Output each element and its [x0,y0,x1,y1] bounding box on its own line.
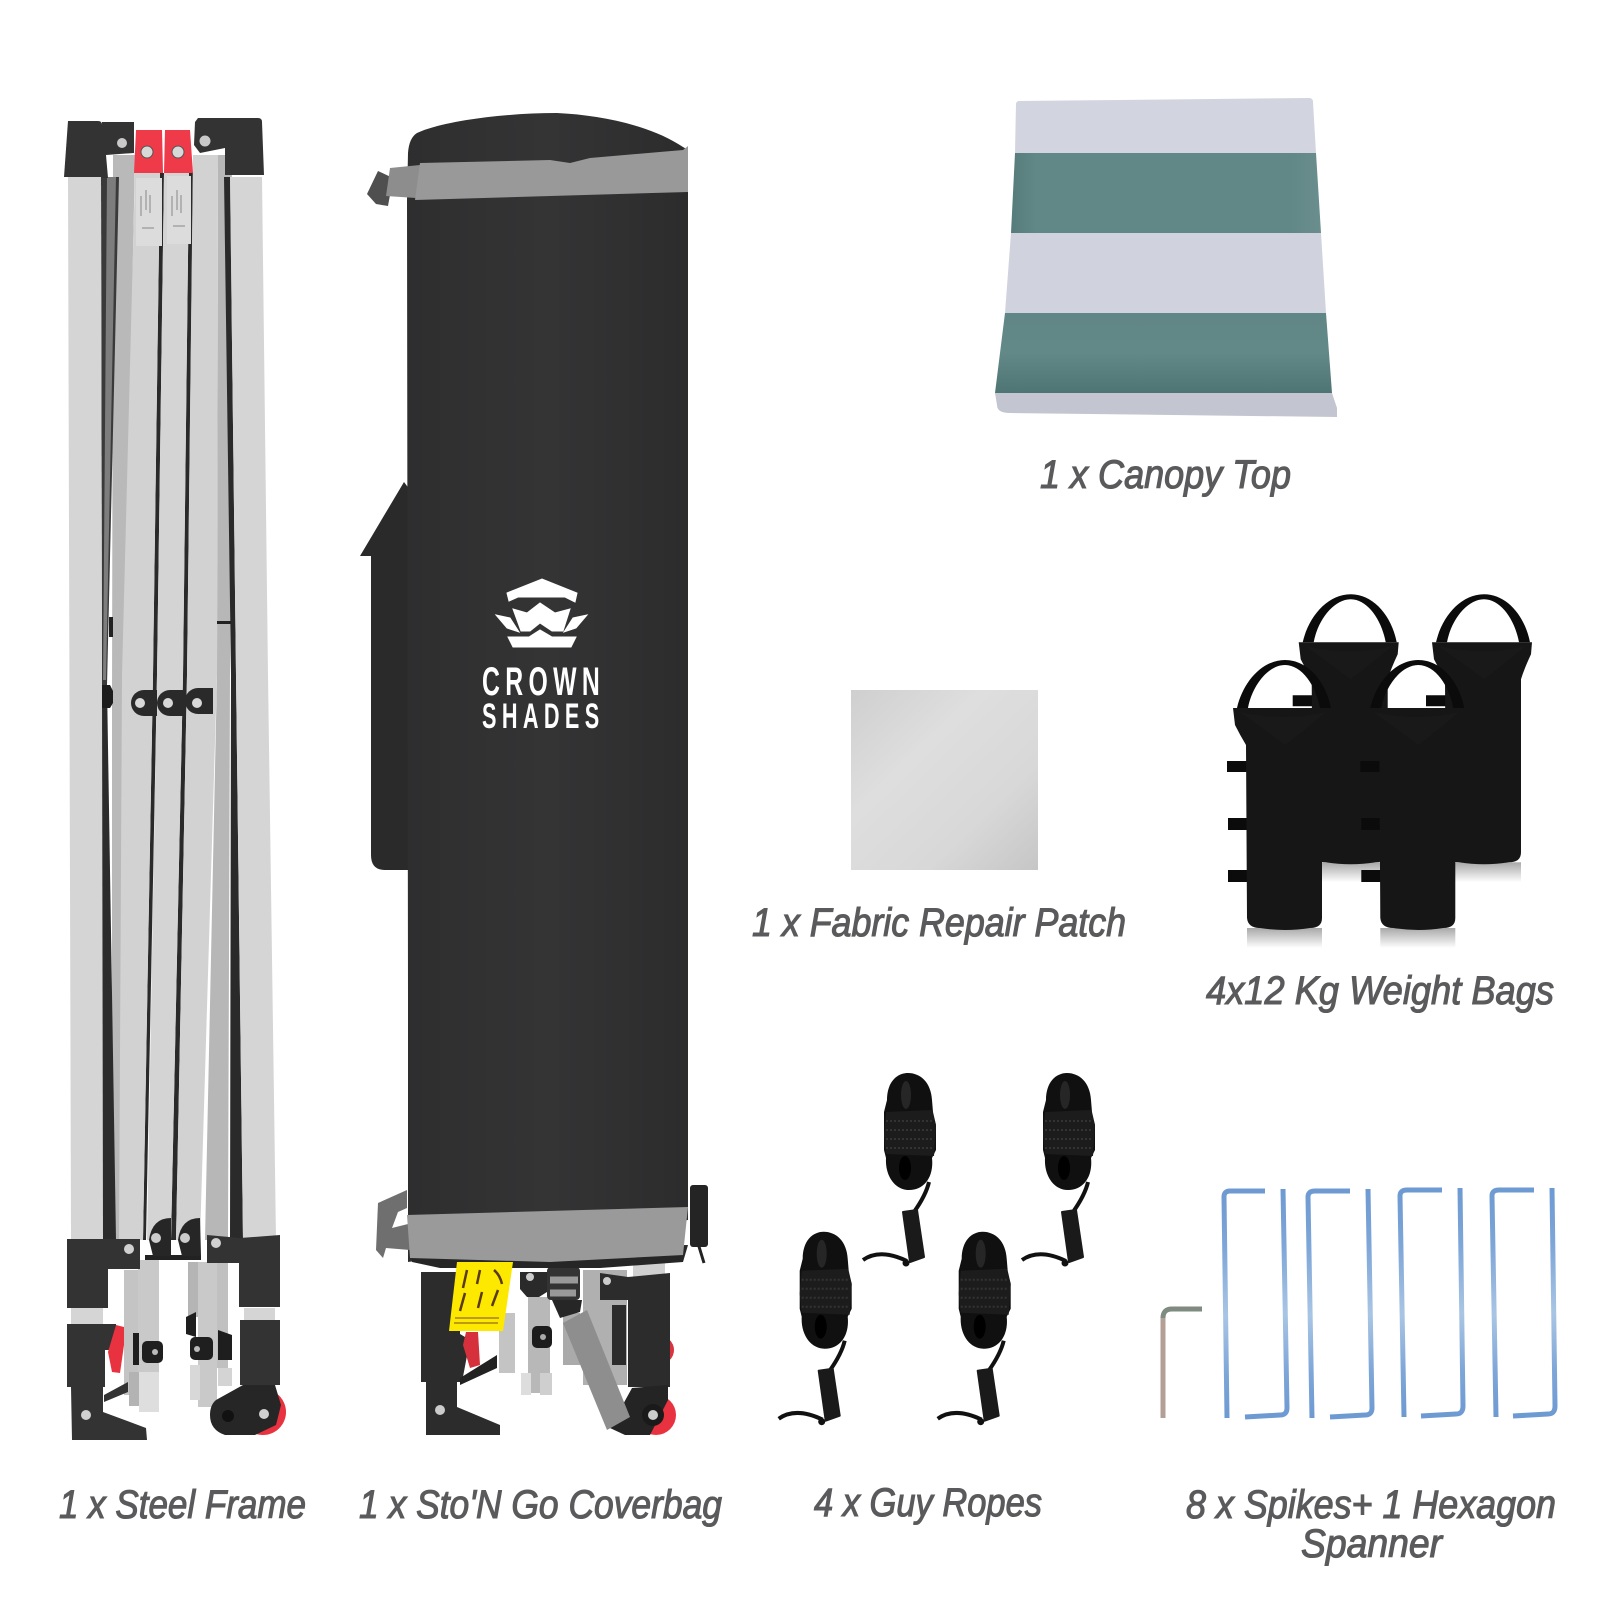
mid hinges [102,617,231,716]
bag body [407,113,688,1262]
frame right foot and wheel [207,1235,286,1435]
bag top strap [367,146,688,206]
crown shades logo: CROWN [482,660,600,705]
yellow instruction label [449,1262,513,1331]
bag strap and buckle [547,1267,630,1430]
panel: fabric repair patch [851,690,1038,870]
panel: guy ropes [779,1073,1095,1425]
crown shades logo [482,579,600,736]
spike pair 1 [1224,1189,1287,1418]
panel: steel frame [64,118,286,1440]
label: canopy top: 1 x Canopy Top [1040,453,1291,497]
top corner brackets [64,118,264,246]
label: steel frame: 1 x Steel Frame [59,1483,306,1527]
bag side pocket [360,482,410,870]
label: spikes and spanner [1186,1483,1556,1566]
hexagon spanner [1163,1309,1202,1418]
bag left foot [421,1272,500,1435]
spike pair 4 [1492,1188,1555,1417]
frame poles [68,155,276,1240]
frame left foot [67,1239,147,1440]
panel: weight bags [1227,594,1532,948]
bag bottom strap [376,1185,708,1268]
frame lower legs [124,1260,232,1412]
label: spikes and spanner: Spanner [1301,1522,1444,1566]
frame centre hinges [145,1218,201,1260]
panel: spikes and hexagon spanner [1163,1188,1555,1418]
label: coverbag: 1 x Sto'N Go Coverbag [359,1483,722,1527]
bag lower frame [499,1263,676,1435]
spike pair 2 [1308,1189,1372,1418]
label: spikes and spanner: 8 x Spikes+ 1 Hexagon [1186,1483,1556,1527]
crown shades logo: SHADES [482,698,599,736]
label: weight bags: 4x12 Kg Weight Bags [1206,969,1554,1013]
panel: canopy top [995,98,1337,417]
label: fabric repair patch: 1 x Fabric Repair Patch [752,901,1126,945]
label: guy ropes: 4 x Guy Ropes [814,1481,1042,1525]
spike pair 3 [1400,1188,1463,1417]
panel: coverbag [360,113,708,1435]
